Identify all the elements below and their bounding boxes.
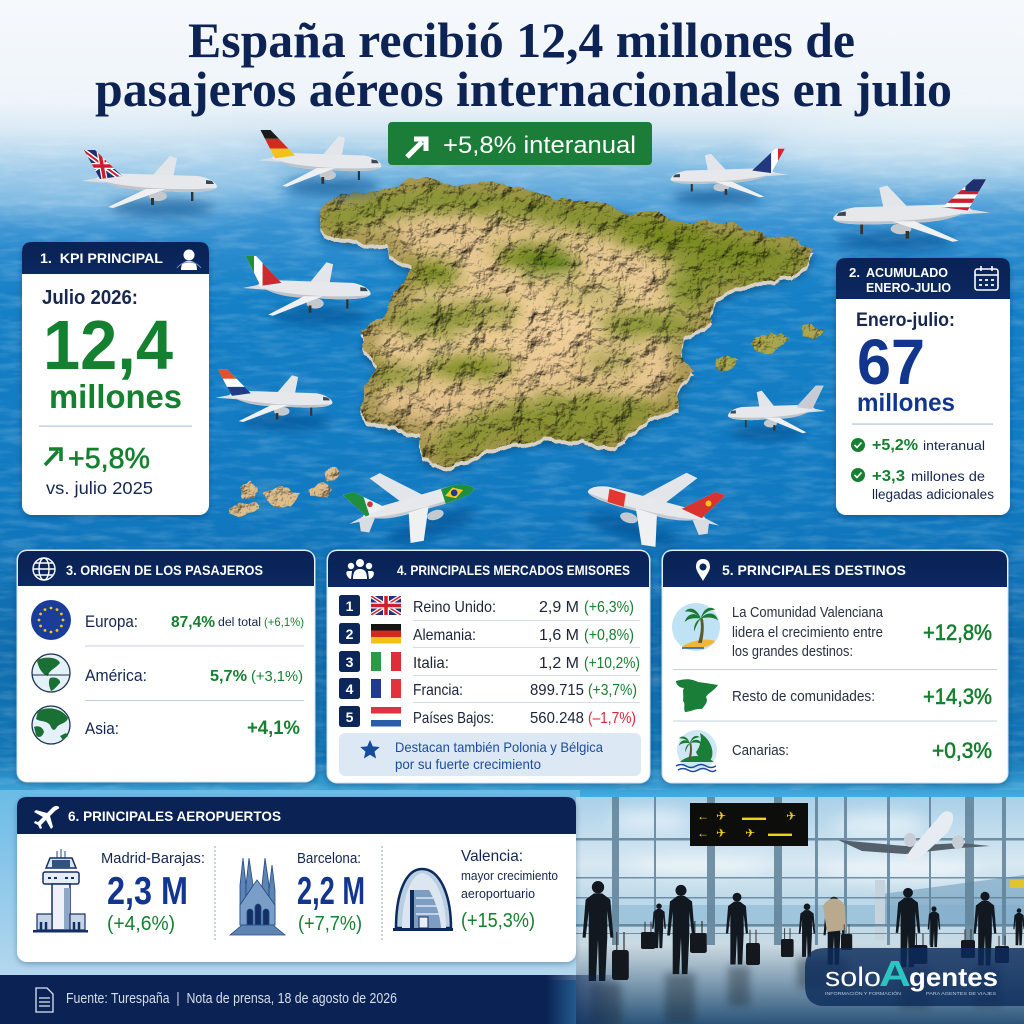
row 5: Países Bajos xyxy=(339,706,636,727)
logo: soloAgentes: PARA AGENTES DE VIAJES xyxy=(926,991,996,996)
panel 1: KPI principal: vs. julio 2025 xyxy=(46,478,153,498)
panel 1: KPI principal: 12,4 xyxy=(43,306,173,384)
badge: interannual growth: +5,8% interanual xyxy=(443,132,636,159)
window frame xyxy=(576,797,1024,947)
panel 5: principales destinos: La Comunidad Valenciana xyxy=(732,605,884,621)
row 1: Reino Unido xyxy=(339,595,634,616)
row 2: Alemania: Alemania: xyxy=(413,627,476,644)
icon: calendar xyxy=(975,266,998,290)
row 3: Italia: (+10,2%) xyxy=(584,655,640,672)
sign: departures board: ▬▬▬ xyxy=(742,813,766,822)
panel 6: principales aeropuertos: (+7,7%) xyxy=(298,913,362,935)
sign: departures board: ✈ xyxy=(786,809,796,823)
sign: departures board xyxy=(690,803,808,846)
row 2: Alemania: 2 xyxy=(346,626,354,642)
row 2: Alemania: 1,6 M xyxy=(539,627,579,644)
panel 5: principales destinos: los grandes destinos: xyxy=(732,644,853,660)
row 1: Reino Unido: (+6,3%) xyxy=(584,599,634,616)
panel 6: principales aeropuertos: 2,2 M xyxy=(297,870,365,913)
icon: palm island xyxy=(672,603,720,651)
sign: departures board: ✈ xyxy=(716,826,726,840)
plane: United Kingdom xyxy=(78,148,217,217)
row 5: Países Bajos: (–1,7%) xyxy=(588,710,636,727)
icon: airplane xyxy=(34,806,59,829)
panel 6: principales aeropuertos: Madrid-Barajas: xyxy=(101,850,205,867)
sign: departures board: ✈ xyxy=(716,809,726,823)
plane: United States xyxy=(833,177,993,252)
panel 1: KPI principal: Julio 2026: xyxy=(42,287,138,309)
row 4: Francia: (+3,7%) xyxy=(588,682,637,699)
islands: Balearics xyxy=(715,324,822,372)
panel 3: origen de los pasajeros: (+6,1%) xyxy=(264,615,304,629)
panel 5: principales destinos: lidera el crecimiento entre xyxy=(732,625,883,641)
title xyxy=(95,12,952,117)
callout: Polonia y Bélgica: por su fuerte crecimiento xyxy=(395,756,541,772)
distant apron xyxy=(576,875,1024,940)
panel 3: origen de los pasajeros: +4,1% xyxy=(247,718,300,739)
icon: Valencia building xyxy=(393,869,453,931)
panel 3: origen de los pasajeros: Asia: xyxy=(85,720,119,738)
plane: Brazil xyxy=(343,473,478,546)
row 4: Francia: 4 xyxy=(346,681,354,697)
row 2: Alemania xyxy=(339,623,634,644)
icon: person xyxy=(177,250,201,270)
icon: globe America xyxy=(32,654,70,692)
panel 2: acumulado enero-julio: ENERO-JULIO xyxy=(866,281,951,295)
badge: interannual growth xyxy=(388,122,652,165)
row 3: Italia: 3 xyxy=(346,654,354,670)
icon: pin xyxy=(696,559,710,581)
row 3: Italia: 1,2 M xyxy=(539,655,579,672)
photo: airport terminal xyxy=(576,797,1024,1024)
panel 2: acumulado enero-julio: millones de xyxy=(911,469,985,484)
panel 2: acumulado enero-julio: ACUMULADO xyxy=(866,266,948,280)
sign: departures board: ▬▬▬ xyxy=(768,829,792,838)
icon: globe Asia xyxy=(32,706,70,744)
icon: Canary island xyxy=(676,730,717,772)
row 4: Francia: 899.715 xyxy=(530,682,584,699)
plane: white on the east xyxy=(728,384,828,441)
icon: Sagrada Família xyxy=(230,858,285,935)
panel 1: KPI principal xyxy=(22,242,209,515)
plane: Netherlands xyxy=(213,368,333,430)
panel 1: KPI principal: +5,8% xyxy=(68,443,150,475)
panel 3: origen de los pasajeros xyxy=(17,550,315,782)
row 3: Italia: Italia: xyxy=(413,655,449,672)
icon: globe xyxy=(33,558,55,580)
plane: Germany xyxy=(255,128,381,196)
icon: check xyxy=(851,438,865,452)
panel 5: principales destinos: +0,3% xyxy=(932,738,992,763)
panel 5: principales destinos: +12,8% xyxy=(923,620,992,645)
panel 2: acumulado enero-julio: Enero-julio: xyxy=(856,310,955,331)
row 5: Países Bajos: 560.248 xyxy=(530,710,584,727)
icon: up arrow xyxy=(45,449,61,465)
panel 3: origen de los pasajeros: 3. ORIGEN DE LOS PASAJEROS xyxy=(66,562,263,578)
footer: source xyxy=(0,975,620,1024)
panel 2: acumulado enero-julio: 2. xyxy=(849,266,860,280)
icon: document xyxy=(36,988,53,1012)
panel 6: principales aeropuertos: 6. PRINCIPALES AEROPUERTOS xyxy=(68,808,281,824)
row 4: Francia xyxy=(339,678,637,699)
plane: red tail xyxy=(584,472,726,550)
logo: soloAgentes xyxy=(805,948,1024,1006)
panel 2: acumulado enero-julio: +3,3 xyxy=(872,468,905,485)
panel 3: origen de los pasajeros: América: xyxy=(85,667,147,685)
panel 3: origen de los pasajeros: Europa: xyxy=(85,613,138,631)
panel 6: principales aeropuertos: mayor crecimiento xyxy=(461,868,558,883)
panel 1: KPI principal: millones xyxy=(49,378,182,415)
panel 3: origen de los pasajeros: (+3,1%) xyxy=(251,668,303,685)
sign: departures board: ← xyxy=(697,826,709,840)
panel 5: principales destinos xyxy=(662,550,1008,783)
panel 6: principales aeropuertos xyxy=(17,797,576,962)
panel 6: principales aeropuertos: Barcelona: xyxy=(297,851,361,867)
panel 2: acumulado enero-julio: 67 xyxy=(857,326,925,398)
panel 1: KPI principal: 1. KPI PRINCIPAL xyxy=(40,250,163,266)
panel 2: acumulado enero-julio: llegadas adicionales xyxy=(872,487,994,502)
panel 6: principales aeropuertos: aeroportuario xyxy=(461,886,535,901)
row 5: Países Bajos: Países Bajos: xyxy=(413,710,494,727)
row 3: Italia xyxy=(339,651,640,672)
panel 6: principales aeropuertos: (+4,6%) xyxy=(107,913,175,935)
panel 2: acumulado enero-julio xyxy=(836,258,1010,515)
panel 4: principales mercados emisores xyxy=(327,550,650,783)
panel 3: origen de los pasajeros: 87,4% xyxy=(171,614,215,631)
panel 6: principales aeropuertos: Valencia: xyxy=(461,848,523,865)
map: Spain relief xyxy=(300,170,830,480)
panel 6: principales aeropuertos: 2,3 M xyxy=(107,870,188,913)
panel 3: origen de los pasajeros: del total xyxy=(218,617,261,629)
panel 2: acumulado enero-julio: +5,2% xyxy=(872,437,918,454)
callout: Polonia y Bélgica xyxy=(339,733,641,776)
row 1: Reino Unido: Reino Unido: xyxy=(413,599,496,616)
panel 5: principales destinos: +14,3% xyxy=(923,684,992,709)
plane: France xyxy=(670,147,790,205)
callout: Polonia y Bélgica: Destacan también Polonia y Bélgica xyxy=(395,739,603,755)
icon: Spain map xyxy=(676,679,718,712)
logo: soloAgentes: A xyxy=(879,953,911,994)
panel 2: acumulado enero-julio: interanual xyxy=(923,438,985,453)
icon: check xyxy=(851,468,865,482)
reflections xyxy=(590,958,1001,1024)
panel 5: principales destinos: Resto de comunidades: xyxy=(732,689,875,705)
row 1: Reino Unido: 2,9 M xyxy=(539,599,579,616)
logo: soloAgentes: INFORMACIÓN Y FORMACIÓN xyxy=(825,990,901,996)
logo: soloAgentes: solo xyxy=(825,962,881,992)
islands: Canaries xyxy=(227,469,340,517)
panel 4: principales mercados emisores: 4. PRINCIPALES MERCADOS EMISORES xyxy=(397,562,630,578)
title: España recibió 12,4 millones de xyxy=(188,12,855,68)
row 5: Países Bajos: 5 xyxy=(346,709,354,725)
row 1: Reino Unido: 1 xyxy=(346,598,354,614)
icon: people xyxy=(346,559,374,579)
panel 2: acumulado enero-julio: millones xyxy=(857,389,955,417)
sign: departures board: ✈ xyxy=(745,826,755,840)
travellers xyxy=(583,881,1024,981)
panel 6: principales aeropuertos: (+15,3%) xyxy=(461,910,535,932)
row 2: Alemania: (+0,8%) xyxy=(584,627,634,644)
title: pasajeros aéreos internacionales en julio xyxy=(95,61,952,117)
panel 5: principales destinos: Canarias: xyxy=(732,743,789,759)
panel 3: origen de los pasajeros: 5,7% xyxy=(210,668,247,685)
panel 5: principales destinos: 5. PRINCIPALES DESTINOS xyxy=(722,562,906,578)
row 4: Francia: Francia: xyxy=(413,682,463,699)
plane: Italy xyxy=(240,254,371,325)
icon: control tower xyxy=(33,849,88,932)
sign: departures board: ← xyxy=(697,809,709,823)
plane in the sky xyxy=(838,811,990,863)
icon: EU flag xyxy=(31,600,71,640)
footer: source: Fuente: Turespaña | Nota de prensa, 18 de agosto de 2026 xyxy=(66,991,397,1007)
logo: soloAgentes: gentes xyxy=(909,962,998,992)
